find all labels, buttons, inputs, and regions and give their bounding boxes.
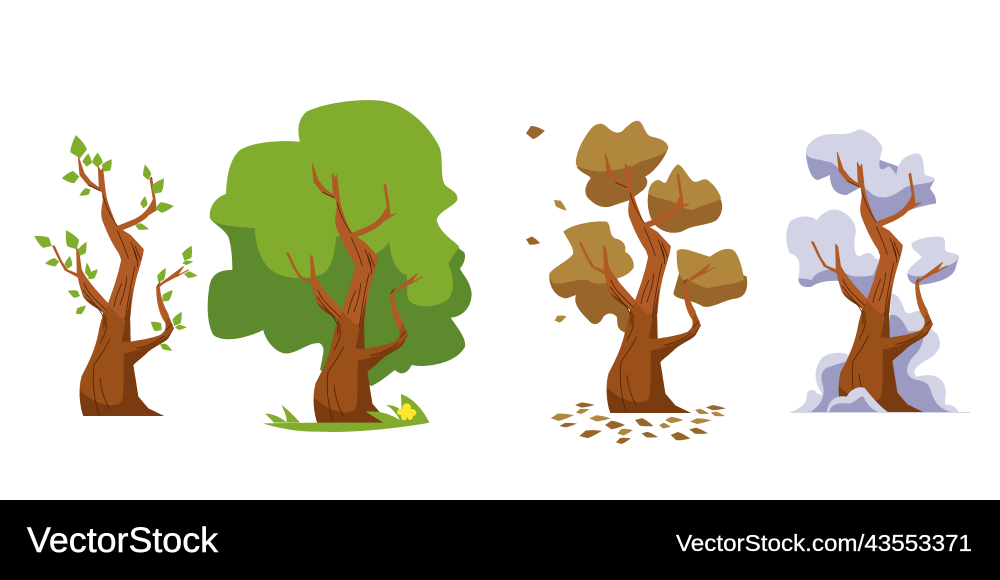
autumn trunk <box>580 154 715 413</box>
winter snow mound in front of trunk <box>790 387 970 413</box>
winter trunk <box>812 153 947 412</box>
logo text: VectorStock <box>27 521 219 560</box>
summer crown <box>208 100 472 386</box>
watermark bar <box>0 500 1000 580</box>
spring trunk <box>53 157 188 416</box>
spring tree <box>31 134 198 416</box>
summer trunk <box>287 164 422 423</box>
winter snow behind trunk <box>786 129 959 412</box>
summer grass <box>263 394 429 432</box>
spring leaves <box>31 134 198 353</box>
winter tree <box>786 129 970 413</box>
icon: yellow flower <box>397 403 416 420</box>
autumn tree <box>525 121 747 445</box>
image id text: VectorStock.com/43553371 <box>676 530 972 556</box>
summer tree <box>208 100 472 432</box>
autumn crown <box>549 121 747 333</box>
falling and fallen leaves <box>525 124 726 445</box>
